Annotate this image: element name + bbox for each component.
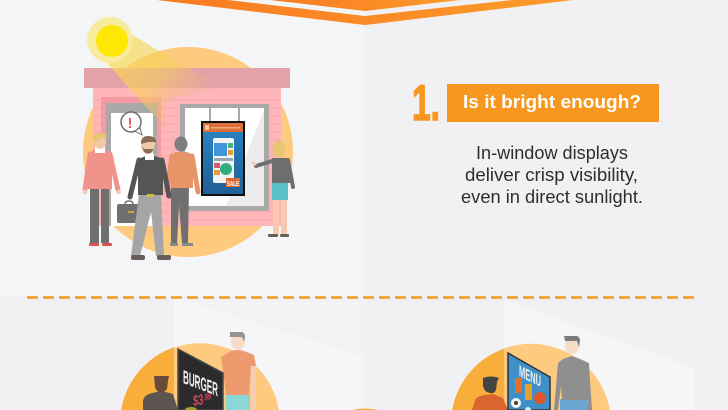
sun circle backdrop [83,47,293,257]
top chevron banner [157,0,573,25]
person: man in grey sweater [554,336,592,410]
window [180,104,269,211]
person: man with briefcase [117,136,171,260]
burger price: $3 [193,391,210,410]
illustration: storefront with in-window display [83,17,293,260]
heading bar [447,84,659,122]
backdrop circle [452,344,610,410]
SALE tag text: SALE [227,181,239,188]
description text [461,143,643,207]
burger display screen [178,349,223,410]
speech bubble with exclamation: ! [128,115,132,132]
description text: In-window displays [476,143,628,163]
person: woman pointing [252,140,293,237]
description text: deliver crisp visibility, [465,165,638,185]
description text: even in direct sunlight. [461,187,643,207]
bottom centre element [352,408,378,410]
heading bar: Is it bright enough? [463,92,641,112]
sun beam [97,32,222,128]
heading number: 1. [412,75,440,131]
burger price: .99 [203,391,211,402]
menu display screen [508,353,550,410]
dashed divider [27,296,695,299]
person: man in orange sweater [167,136,198,246]
person: man in pink sweater [85,133,119,246]
burger picture [185,407,197,410]
speech bubble with exclamation [121,112,142,135]
person: man in orange top [472,376,508,410]
person: man in salmon shirt [221,332,256,410]
illustration: food menu display [452,336,610,410]
illustration: burger menu display [121,332,279,410]
sun [87,17,133,63]
menu display screen: MENU [519,362,541,391]
person: man facing screen [143,376,178,410]
storefront building [84,68,290,226]
food icons [515,378,522,393]
display screen [201,121,245,196]
backdrop circle [121,343,279,410]
door [106,103,157,226]
